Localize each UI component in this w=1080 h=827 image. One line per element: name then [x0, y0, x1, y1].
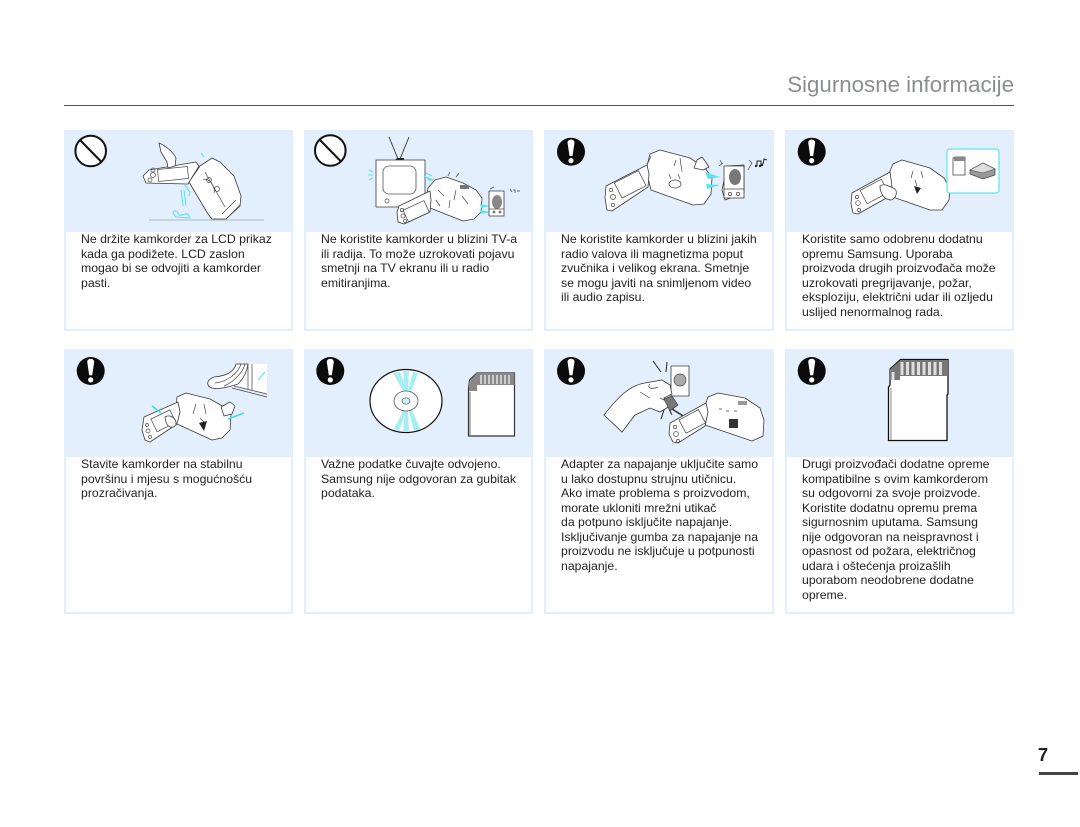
icon: exclamation mark: [798, 357, 826, 385]
illustration: camcorder falling from LCD screen: [143, 143, 264, 220]
illustration area: disc and memory card: [304, 349, 533, 457]
text block: mogao bi se odvojiti a kamkorder: [81, 261, 261, 275]
panel: power adapter: [544, 349, 774, 614]
illustration: memory card: [468, 373, 514, 436]
text block: se mogu javiti na snimljenom video: [561, 276, 751, 290]
illustration area: memory card: [785, 349, 1014, 457]
panel: stable surface: [64, 349, 293, 614]
text block: [561, 232, 757, 304]
text block: proizvodu ne isključuje u potpunosti: [561, 544, 755, 558]
page number bar: [1039, 772, 1078, 775]
icon: exclamation mark: [316, 357, 344, 385]
icon: exclamation mark: [77, 357, 105, 385]
panel: LCD handling warning: [64, 130, 293, 331]
panel: approved accessories: [785, 130, 1014, 331]
text block: Koristite dodatnu opremu prema: [802, 500, 977, 514]
text block: u lako dostupnu strujnu utičnicu.: [561, 472, 736, 486]
icon: exclamation mark: [798, 138, 826, 166]
text block: Isključivanje gumba za napajanje na: [561, 530, 758, 544]
title: Sigurnosne informacije: [787, 72, 1014, 97]
illustration: optical disc: [370, 370, 442, 432]
text block: Samsung nije odgovoran za gubitak: [321, 472, 516, 486]
icon: exclamation mark: [557, 138, 585, 166]
text block: morate ukloniti mrežni utikač: [561, 500, 716, 514]
illustration area: camcorder and accessories: [785, 130, 1014, 232]
text block: eksploziju, električni udar ili ozljedu: [802, 290, 993, 304]
illustration: camcorder with airflow arrows: [142, 393, 244, 442]
illustration: television: [368, 137, 425, 207]
text block: opremu Samsung. Uporaba: [802, 246, 953, 260]
illustration area: camcorder by window: [64, 349, 293, 457]
text block: opreme.: [802, 588, 847, 602]
text block: da potpuno isključite napajanje.: [561, 515, 732, 529]
header rule: [64, 105, 1014, 106]
text block: Važne podatke čuvajte odvojeno.: [321, 457, 501, 471]
icon: prohibition sign: [315, 135, 346, 166]
text block: ili audio zapisu.: [561, 290, 645, 304]
text block: [802, 457, 990, 602]
text block: kada ga podižete. LCD zaslon: [81, 246, 245, 260]
illustration area: camcorder near TV: [304, 130, 533, 232]
text block: površinu i mjesu s mogućnošću: [81, 472, 252, 486]
text block: Ako imate problema s proizvodom,: [561, 486, 750, 500]
text block: uslijed nenormalnog rada.: [802, 304, 943, 318]
text block: ili radija. To može uzrokovati pojavu: [321, 246, 514, 260]
text block: zvučnika i velikog ekrana. Smetnje: [561, 261, 749, 275]
text block: smetnji na TV ekranu ili u radio: [321, 261, 489, 275]
text block: su odgovorni za svoje proizvode.: [802, 486, 981, 500]
panel: data backup: [304, 349, 533, 614]
text block: Ne koristite kamkorder u blizini TV-a: [321, 232, 517, 246]
text block: radio valova ili magnetizma poput: [561, 246, 743, 260]
illustration area: camcorder near speaker: [544, 130, 774, 232]
text block: udara i oštećenja proizašlih: [802, 558, 951, 572]
panel: third-party accessories: [785, 349, 1014, 614]
text block: Ne koristite kamkorder u blizini jakih: [561, 232, 757, 246]
text block: opasnost od požara, električnog: [802, 544, 976, 558]
text block: [802, 232, 996, 318]
text block: kompatibilne s ovim kamkorderom: [802, 472, 988, 486]
illustration area: plug and camcorder: [544, 349, 774, 457]
text block: [321, 457, 516, 500]
text block: podataka.: [321, 486, 375, 500]
panel: TV and radio warning: [304, 130, 533, 331]
text block: nije odgovoran na neispravnost i: [802, 530, 979, 544]
illustration: speaker with music notes: [719, 159, 767, 200]
callout: accessory card and battery charger: [947, 149, 999, 193]
illustration: hand plugging into wall outlet: [604, 361, 689, 432]
panel: magnetic field warning: [544, 130, 774, 331]
text block: [321, 232, 518, 290]
illustration: smiling camcorder: [605, 150, 720, 211]
text block: [561, 457, 758, 572]
illustration: camcorder pointing: [851, 160, 950, 214]
text block: Stavite kamkorder na stabilnu: [81, 457, 243, 471]
text block: Adapter za napajanje uključite samo: [561, 457, 758, 471]
text block: proizvoda drugih proizvođača može: [802, 261, 996, 275]
text block: napajanje.: [561, 558, 618, 572]
illustration: large memory card: [888, 360, 948, 440]
text block: pasti.: [81, 276, 110, 290]
text block: Drugi proizvođači dodatne opreme: [802, 457, 990, 471]
text block: [81, 232, 272, 290]
text block: uzrokovati pregrijavanje, požar,: [802, 276, 972, 290]
icon: exclamation mark: [557, 357, 585, 385]
illustration: window and curtain: [208, 364, 267, 397]
text block: [81, 457, 252, 500]
illustration area: camcorder held by LCD: [64, 130, 293, 232]
page number: 7: [1038, 744, 1048, 765]
icon: prohibition sign: [75, 136, 106, 166]
text block: sigurnosnim uputama. Samsung: [802, 515, 978, 529]
text block: prozračivanja.: [81, 486, 157, 500]
text block: Koristite samo odobrenu dodatnu: [802, 232, 983, 246]
text block: Ne držite kamkorder za LCD prikaz: [81, 232, 272, 246]
text block: uporabom neodobrene dodatne: [802, 573, 974, 587]
text block: emitiranjima.: [321, 276, 391, 290]
illustration: camcorder: [669, 393, 764, 443]
illustration: camcorder with speaker: [397, 172, 520, 224]
